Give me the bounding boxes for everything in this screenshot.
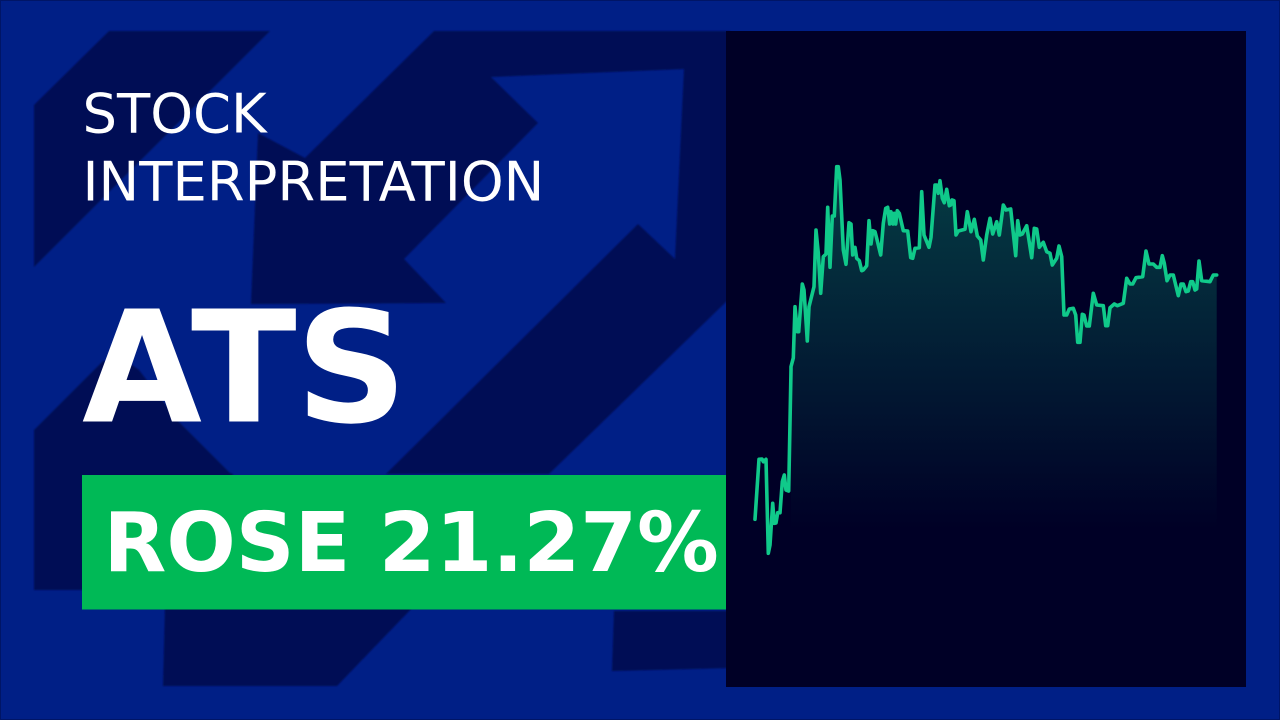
ticker: ATS: ATS	[82, 278, 407, 458]
title: stock interpretation	[82, 82, 544, 214]
panel: price chart	[726, 31, 1246, 687]
chart area fill	[791, 167, 1217, 560]
badge: rose 21.27%	[82, 475, 727, 610]
title: stock interpretation: INTERPRETATION	[82, 150, 544, 214]
background arrow shapes	[34, 31, 730, 686]
badge: rose 21.27%: ROSE 21.27%	[104, 496, 719, 591]
chart price line	[755, 167, 1217, 553]
title: stock interpretation: STOCK	[82, 82, 268, 146]
